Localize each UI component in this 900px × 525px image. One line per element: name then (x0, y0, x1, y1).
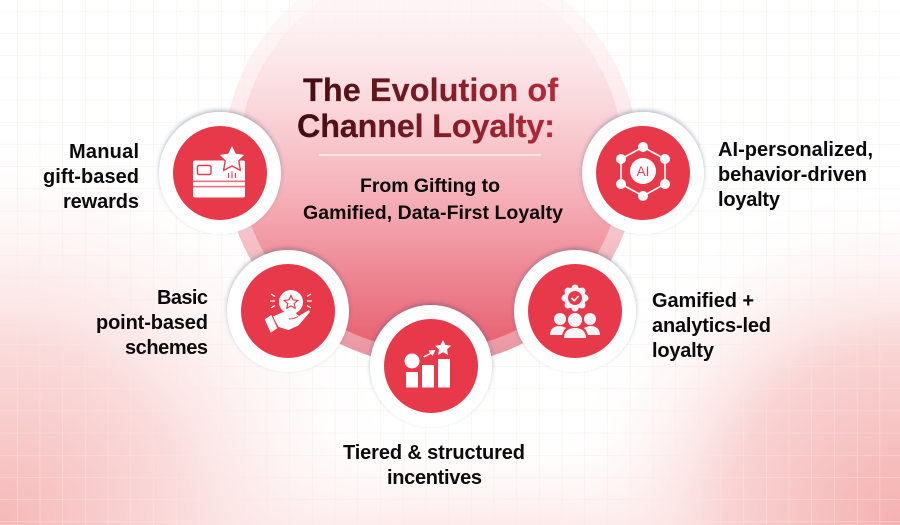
label: basic point-based schemes (96, 287, 208, 359)
divider (319, 154, 541, 156)
step: manual gift-based rewards (159, 112, 281, 234)
label: manual gift-based rewards (43, 141, 139, 213)
label: tiered and structured incentives (343, 442, 525, 489)
central disc with ring (224, 0, 638, 365)
label: AI-personalized behavior-driven loyalty: behavior-driven (718, 164, 867, 186)
icon: gift card with star (193, 144, 246, 198)
step: gamified and analytics-led loyalty (514, 250, 636, 372)
subtitle (303, 175, 563, 224)
label: gamified and analytics-led loyalty: loyalty (652, 340, 715, 362)
label: basic point-based schemes: Basic (157, 287, 208, 309)
label: gamified and analytics-led loyalty: Gamified + (652, 290, 754, 312)
label: AI-personalized behavior-driven loyalty: AI-personalized, (718, 139, 873, 161)
icon: hand holding star coin (265, 290, 312, 333)
title: The Evolution of (303, 72, 558, 108)
label: manual gift-based rewards: gift-based (43, 166, 139, 188)
label: gamified and analytics-led loyalty: analytics-led (652, 315, 771, 337)
icon: badge over three people (550, 284, 600, 338)
label: gamified and analytics-led loyalty (652, 290, 771, 362)
step: tiered and structured incentives (370, 305, 492, 427)
label: tiered and structured incentives: incentives (387, 467, 482, 489)
label: manual gift-based rewards: Manual (69, 141, 139, 163)
title (297, 72, 558, 144)
title: Channel Loyalty: (297, 108, 555, 144)
label: basic point-based schemes: point-based (96, 312, 208, 334)
step: AI-personalized behavior-driven loyalty (582, 112, 704, 234)
label: basic point-based schemes: schemes (125, 337, 208, 359)
subtitle: From Gifting to (360, 175, 500, 197)
label: AI-personalized behavior-driven loyalty: loyalty (718, 189, 781, 211)
step: basic point-based schemes (227, 250, 349, 372)
subtitle: Gamified, Data-First Loyalty (303, 202, 563, 224)
label: tiered and structured incentives: Tiered & structured (343, 442, 525, 464)
icon: AI hexagon network: AI (637, 164, 649, 179)
icon: rising bars with arrow and star (404, 340, 451, 388)
label: manual gift-based rewards: rewards (63, 191, 139, 213)
label: AI-personalized behavior-driven loyalty (718, 139, 873, 211)
